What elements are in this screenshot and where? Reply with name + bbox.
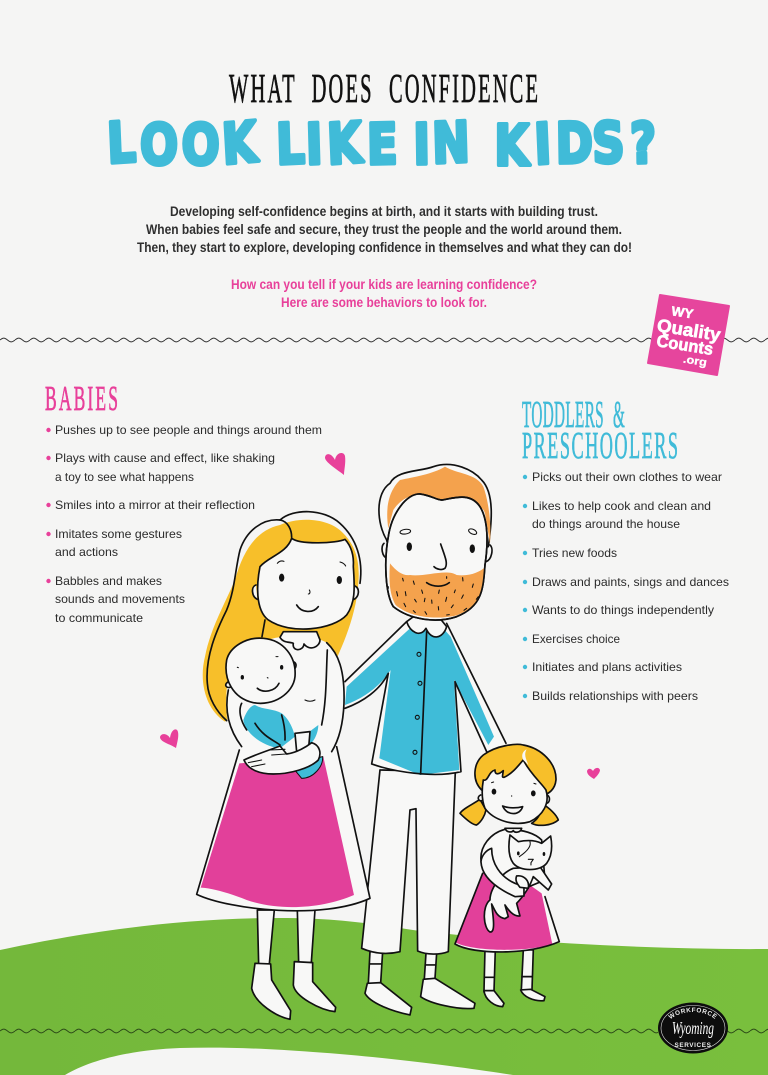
logo: WY Quality Counts: Quality [656,315,722,345]
list: baby behaviors: Smiles into a mirror at their reflection [55,498,255,512]
icon: heart top [325,453,345,475]
bottom wavy divider [0,1027,768,1035]
girl hand [516,876,529,888]
girl pigtails and hair [460,744,558,825]
dad shirt [337,617,506,775]
logo: WY Quality Counts [648,295,729,375]
mom hair [203,512,361,722]
list: baby behaviors: and actions [55,545,118,559]
dad head [379,465,492,620]
heading: babies: BABIES [45,378,118,418]
cat [484,835,552,932]
dad [337,465,506,1015]
list: toddler behaviors: Initiates and plans activities [532,660,682,674]
logo: workforce services wyoming: SERVICES [674,1042,712,1049]
list: baby behaviors: Imitates some gestures [55,527,182,541]
list: toddler behaviors: Draws and paints, sings and dances [532,575,729,589]
mom [197,512,370,1019]
heading: toddlers and preschoolers: PRESCHOOLERS [522,425,678,467]
icon: heart left [160,729,178,748]
list: toddler behaviors: Likes to help cook and clean and [532,499,711,513]
list: baby behaviors: sounds and movements [55,592,185,606]
list: toddler behaviors: Exercises choice [532,632,620,646]
heading: toddlers and preschoolers [522,394,678,467]
dad legs and shoes [362,770,475,1015]
panel: toddlers and preschoolers [522,394,729,703]
logo: WY Quality Counts: WY [670,303,695,322]
girl [455,744,559,1007]
girl skirt [455,873,559,952]
list: baby behaviors: Plays with cause and effect, like shaking [55,451,275,465]
intro paragraph: Developing self-confidence begins at birth, and it starts with building trust. [170,203,598,219]
pink question: How can you tell if your kids are learning confidence? [231,276,537,292]
logo: workforce services wyoming: Wyoming [672,1018,714,1038]
list: baby behaviors: a toy to see what happens [55,470,194,484]
baby [226,638,318,752]
list: toddler behaviors: do things around the house [532,517,680,531]
list: baby behaviors: to communicate [55,611,143,625]
list: baby behaviors: Pushes up to see people and things around them [55,423,322,437]
logo: WY Quality Counts: .org [682,354,708,369]
heading: toddlers and preschoolers: TODDLERS & [522,394,625,436]
list: toddler behaviors: Wants to do things independently [532,603,714,617]
girl torso and collar [481,828,545,897]
girl legs and shoes [484,950,545,1007]
green hill background [0,918,768,1075]
girl arm [481,848,524,897]
mom skirt [197,747,370,911]
panel: babies [45,378,322,625]
top wavy divider [0,336,768,344]
icon: heart right [587,768,600,779]
intro paragraph: Then, they start to explore, developing confidence in themselves and what they can do! [137,239,632,255]
mom arms and baby foot [244,743,323,778]
title: what does confidence: WHAT DOES CONFIDENCE [229,67,538,112]
title: look like in kids: LOOK LIKE IN KIDS? [106,109,657,178]
list: toddler behaviors: Tries new foods [532,546,617,560]
illustration: family [197,465,559,1019]
mom legs and boots [252,910,336,1019]
list: toddler behaviors: Builds relationships with peers [532,689,698,703]
list: baby behaviors: Babbles and makes [55,574,162,588]
logo: workforce services wyoming: WORKFORCE [668,1008,718,1019]
logo: WY Quality Counts: Counts [655,331,715,359]
intro paragraph: When babies feel safe and secure, they trust the people and the world around them. [146,221,622,237]
list: baby behaviors [46,423,322,625]
pink question [231,276,537,310]
pink question: Here are some behaviors to look for. [281,294,487,310]
mom body and head [226,520,358,758]
intro paragraph [137,203,632,255]
list: toddler behaviors: Picks out their own clothes to wear [532,470,722,484]
logo: workforce services wyoming [658,1002,728,1054]
list: toddler behaviors [523,470,729,703]
